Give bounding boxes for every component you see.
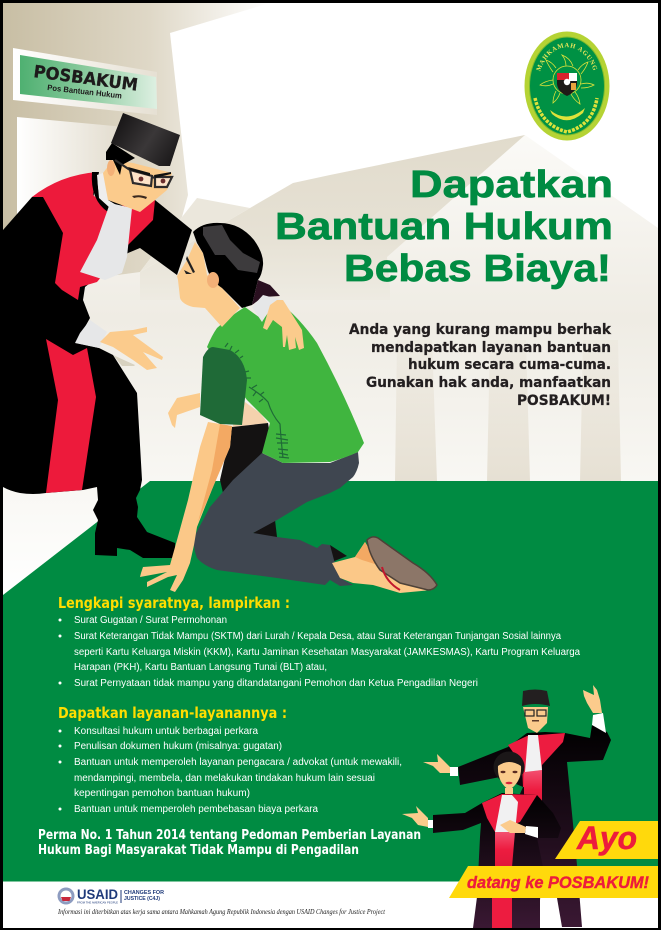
footer: USAID logo: FROM THE AMERICAN PEOPLE [77,902,118,904]
footer note: Informasi ini diterbitkan atas kerja sama antara Mahkamah Agung Republik Indonesia dengan USAID Changes for Justice Project [57,908,386,916]
man rear shoe [330,545,347,562]
male jabot [525,735,542,772]
male raised cuff [592,713,606,733]
female judge figure [402,752,561,928]
female red collar [482,794,537,832]
female chest cuff [525,826,538,838]
man trousers [194,452,359,586]
sandal strap [382,567,400,590]
banner: Ayo [555,820,658,859]
court columns [395,340,621,481]
male red stripe [524,770,542,810]
male judge figure [423,685,611,927]
green floor panel [3,481,658,881]
man hair [193,223,263,308]
seal chain wreath [535,98,597,132]
footer divider [3,881,658,882]
requirements list [58,615,580,689]
female pointing cuff [428,820,433,828]
man rear leg shadow [253,520,277,537]
intro paragraph: mendapatkan layanan bantuan [371,340,611,356]
banner: datang ke POSBAKUM: datang ke POSBAKUM! [467,873,649,892]
footer: USAID logo: CHANGES FOR [124,890,164,896]
hand on shoulder [263,300,304,350]
man rear arm [168,393,200,428]
female red stripe [495,832,515,867]
kneeling man figure [140,223,437,593]
services list: kepentingan pemohon bantuan hukum) [74,788,250,799]
requirements list: Surat Gugatan / Surat Permohonan [74,615,227,626]
judge red stripe [46,339,96,493]
man shirt [207,300,364,463]
sign: POSBAKUM: POSBAKUM [32,62,139,96]
male hat [522,690,550,706]
man face and neck [177,242,240,327]
female hair [494,752,524,782]
judge hand on shoulder [252,295,304,350]
female robe [433,793,561,928]
USAID seal [58,888,74,904]
requirements list: Surat Pernyataan tidak mampu yang ditandatangani Pemohon dan Ketua Pengadilan Negeri [74,678,478,689]
male glasses [525,710,546,716]
male pointing hand [423,754,450,773]
male pointing cuff [450,767,458,776]
judge glasses [115,160,172,187]
judge red collar [32,172,155,300]
intro paragraph: POSBAKUM! [517,393,611,409]
judge eyes and brows [128,167,171,183]
requirements list: seperti Kartu Keluarga Miskin (KKM), Kartu Jaminan Kesehatan Masyarakat (JAMKESMAS), Kartu Program Keluarga [74,647,580,658]
seal sun rays [540,55,594,104]
heading: requirements: Lengkapi syaratnya, lampirkan : [58,594,290,612]
judge neck and face [103,160,172,212]
requirements list: Surat Keterangan Tidak Mampu (SKTM) dari Lurah / Kepala Desa, atau Surat Keterangan Tunjangan Sosial lainnya [74,631,561,642]
footer: USAID logo: USAID [77,886,118,902]
services list: Penulisan dokumen hukum (misalnya: gugatan) [74,741,282,752]
judge second cuff [252,295,282,322]
logo: Mahkamah Agung seal [524,32,610,140]
judge ear [107,160,115,176]
services list: mendampingi, membela, dan melakukan tindakan hukum lain sesuai [74,773,375,784]
judge white collar [97,173,118,208]
judge robe [3,172,192,558]
male moustache [532,720,539,722]
footer: USAID logo: JUSTICE (C4J) [124,896,160,902]
man waist skin and undershirt [232,402,268,427]
judge standing figure [3,113,192,558]
title [275,164,613,290]
male raised hand [583,685,602,713]
female eyes and lips [500,771,518,784]
male robe [458,725,611,927]
banner: datang ke POSBAKUM [449,866,658,898]
man dark inner shirt [220,423,270,493]
sign: POSBAKUM: Pos Bantuan Hukum [47,83,122,100]
man ear [207,272,219,288]
male red collar [508,733,565,790]
judge hair [106,143,135,175]
seal ribbon [550,108,585,120]
sign: POSBAKUM [13,48,157,115]
door [17,117,125,262]
judge jabot [80,203,132,280]
judge black neck band [92,172,109,212]
wall with door [3,3,270,290]
judge open hand [100,327,163,370]
man brow and eye [184,256,195,274]
man hair highlight [203,225,260,273]
services list: Bantuan untuk memperoleh layanan pengacara / advokat (untuk mewakili, [74,757,402,768]
requirements list: Harapan (PKH), Kartu Bantuan Langsung Tunai (BLT) atau, [74,662,327,673]
title: Bebas Biaya! [344,248,611,290]
intro paragraph [349,322,612,409]
services list: Konsultasi hukum untuk berbagai perkara [74,726,258,737]
female lower stripe [492,898,512,928]
intro paragraph: Anda yang kurang mampu berhak [349,322,612,338]
intro paragraph: Gunakan hak anda, manfaatkan [366,375,611,391]
female jabot [495,795,518,832]
services list [58,726,402,815]
footer: USAID logo [58,886,164,904]
judge moustache [132,195,147,199]
title: Bantuan Hukum [275,206,613,248]
man dark sleeve [200,347,247,425]
shadow under hand [113,355,135,366]
regulation reference: Hukum Bagi Masyarakat Tidak Mampu di Pengadilan [38,843,359,858]
regulation reference [38,828,421,858]
regulation reference: Perma No. 1 Tahun 2014 tentang Pedoman Pemberian Layanan [38,828,421,843]
female chest hand [500,820,526,833]
female pointing hand [402,806,428,827]
male head [523,707,548,733]
banner: Ayo: Ayo [576,820,637,856]
intro paragraph: hukum secara cuma-cuma. [408,357,611,373]
female face [498,762,521,794]
man front arm and hand [140,422,232,592]
sandal sole [367,537,437,590]
man foot [332,537,437,593]
judge cuff [75,320,107,348]
heading: services: Dapatkan layanan-layanannya : [58,704,287,722]
judge hat [111,113,180,166]
seal text: MAHKAMAH AGUNG [536,42,598,72]
title: Dapatkan [410,164,613,206]
services list: Bantuan untuk memperoleh pembebasan biaya perkara [74,804,318,815]
seal shield [557,73,577,96]
man arm shading [198,424,232,522]
man hair tail [252,280,280,305]
shirt stitches [225,343,289,458]
